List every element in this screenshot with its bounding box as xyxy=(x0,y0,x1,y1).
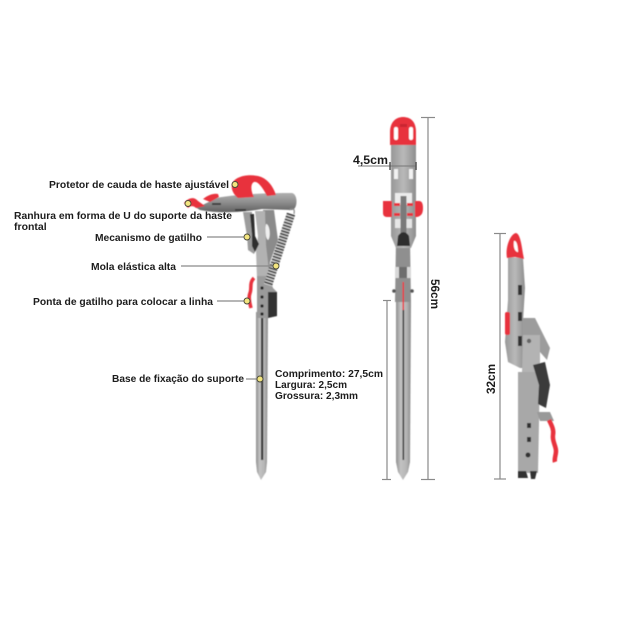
right product: upper body xyxy=(505,257,525,368)
left product: ground spike xyxy=(256,312,268,480)
right product: red tip opening xyxy=(514,241,518,252)
label: U-shaped groove: Ranhura em forma de U do suporte da haste xyxy=(14,210,232,222)
label: U-shaped groove: frontal xyxy=(14,221,47,233)
label: spring: Mola elástica alta xyxy=(91,261,176,273)
left product: spring xyxy=(268,209,294,285)
leader lines xyxy=(181,237,276,379)
left product: red tail protector xyxy=(232,175,276,198)
label: trigger tip: Ponta de gatilho para colocar a linha xyxy=(33,296,213,308)
text block: base dimensions: Largura: 2,5cm xyxy=(275,379,347,391)
dimension: 32cm height: 32cm xyxy=(484,364,498,394)
center product: front view of rod holder xyxy=(383,117,423,480)
center product: spike xyxy=(396,300,411,480)
label: base: Base de fixação do suporte xyxy=(112,373,244,385)
center product: body openings xyxy=(394,169,413,246)
left product: side view of rod holder xyxy=(184,175,296,480)
text block: base dimensions xyxy=(275,368,383,402)
left product: rod tube xyxy=(195,193,296,212)
dimension: 4,5cm width: 4,5cm xyxy=(353,153,388,167)
dimension: spike height xyxy=(382,300,391,480)
dimension: 56cm height: 56cm xyxy=(428,279,442,309)
left product: frame arms xyxy=(243,210,278,318)
right product: red side clip xyxy=(505,312,510,335)
right product: red tip xyxy=(507,233,524,259)
right product: slots xyxy=(518,285,537,479)
center product: body xyxy=(391,145,416,248)
left product: U-shaped front support xyxy=(184,194,219,208)
label: trigger mechanism: Mecanismo de gatilho xyxy=(95,232,202,244)
text block: base dimensions: Grossura: 2,3mm xyxy=(275,390,358,402)
right product: hinged plate xyxy=(522,318,554,421)
center product: red cap xyxy=(390,117,416,145)
left product: red trigger tip xyxy=(249,278,254,308)
right product: folded holder xyxy=(505,233,556,479)
text block: base dimensions: Comprimento: 27,5cm xyxy=(275,368,383,380)
center product: red side supports xyxy=(383,201,423,217)
left product: tube slots xyxy=(212,203,246,211)
dimension: 4,5cm width xyxy=(353,153,416,170)
right product: red trigger xyxy=(549,420,556,462)
callout markers xyxy=(185,182,279,382)
center product: neck xyxy=(392,240,414,310)
label: tail protector: Protetor de cauda de haste ajustável xyxy=(49,179,229,191)
right product: lower plate xyxy=(518,372,540,473)
